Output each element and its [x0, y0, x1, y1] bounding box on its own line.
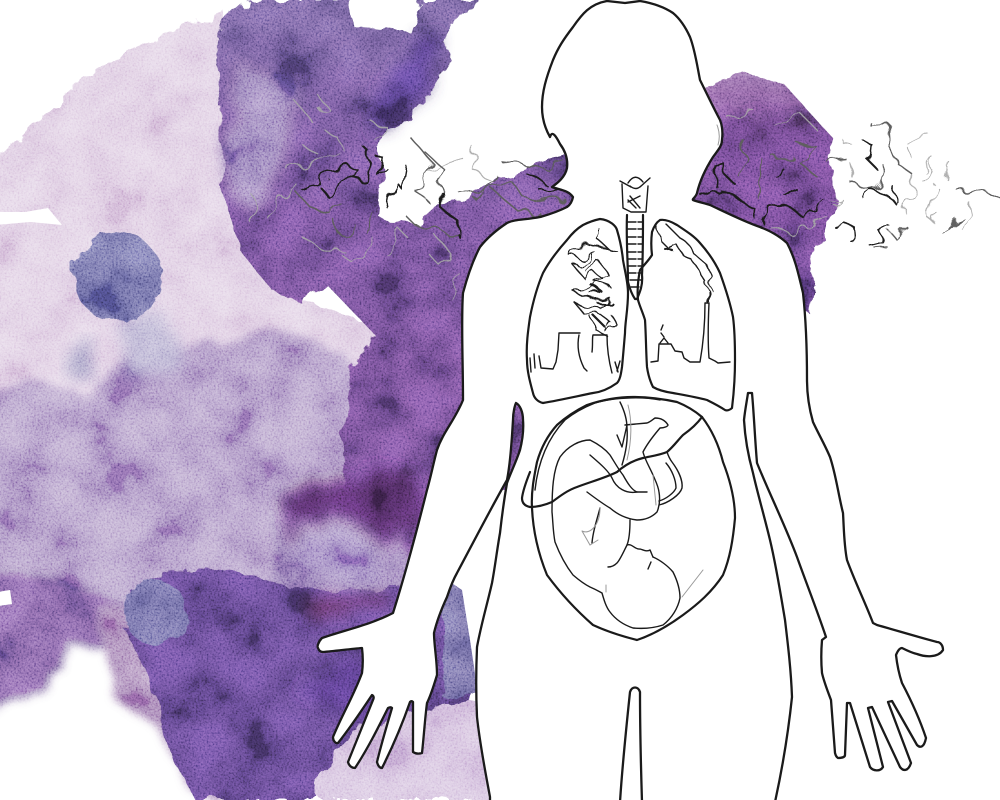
figure: body silhouette: [318, 1, 943, 800]
smoke: left lung plume: [570, 228, 618, 335]
wash: small white gaps: [0, 590, 12, 606]
blot: blue circle lower: [123, 580, 187, 644]
organ: left lung: [522, 219, 735, 640]
wash: mid lavender: [0, 330, 380, 800]
wash: clean gap between arm and torso: [440, 490, 510, 680]
organ: uterus: [522, 397, 735, 640]
factory: left lung cooling towers: [530, 333, 620, 373]
blot: blue circle upper: [65, 233, 180, 385]
organ: right lung: [638, 220, 735, 410]
wash: pale lavender: [0, 12, 385, 600]
smoke: right lung plume: [658, 226, 712, 302]
organ: trachea: [627, 215, 643, 299]
wash: right purple mass: [680, 72, 835, 310]
fetus: body outline: [552, 440, 680, 628]
wash: white notch left: [0, 208, 62, 225]
umbilical line: tube crossing the abdomen: [522, 417, 702, 507]
blot: maroon pigment pools: [225, 30, 440, 720]
factory: right lung skyline: [651, 303, 730, 363]
smoke wisps: right cluster: [703, 110, 1000, 248]
smoke wisps: left cluster: [250, 97, 563, 297]
wash: lower dark purple: [125, 568, 500, 800]
wash: dark purple upper mass: [215, 0, 600, 640]
organ: right hair highlight: [717, 125, 719, 145]
organ: larynx: [620, 177, 650, 212]
wash: mottled mid-tone under maroon: [270, 490, 420, 610]
